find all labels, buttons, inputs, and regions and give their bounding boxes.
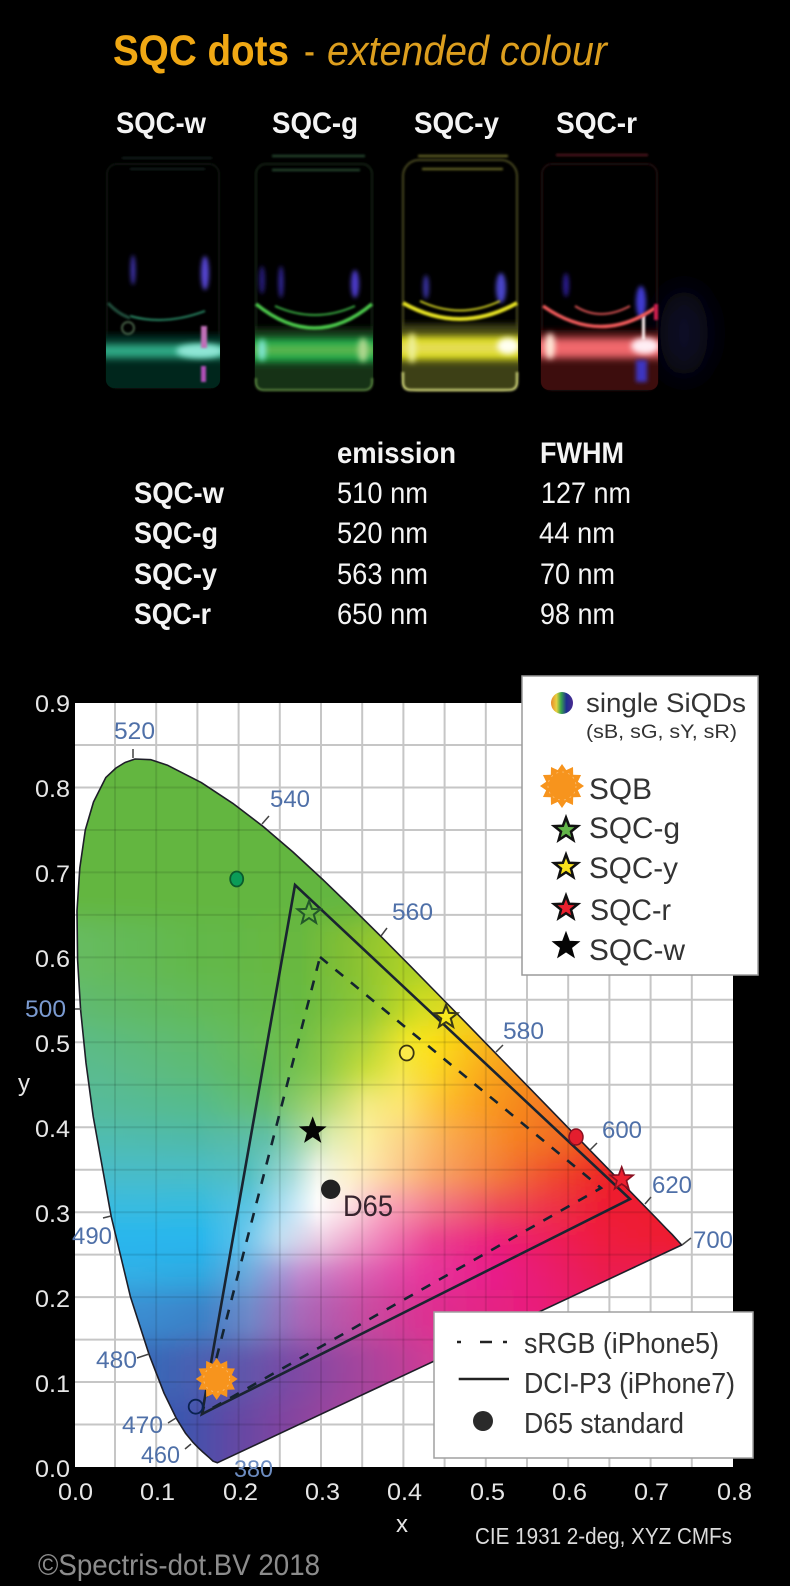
wavelength labels: 480 xyxy=(96,1347,137,1374)
y axis labels: 0.5 xyxy=(35,1031,70,1058)
legend: gamuts xyxy=(434,1312,753,1458)
legend icon: SQB xyxy=(540,764,584,808)
axis title: x: x xyxy=(396,1511,408,1538)
axis title: y: y xyxy=(18,1070,30,1097)
legend label: SQB: SQB xyxy=(589,773,652,806)
title: - xyxy=(304,27,315,74)
row: SQC-w: 127 nm xyxy=(541,477,631,510)
row: SQC-r: SQC-r xyxy=(134,598,211,631)
marker: D65 xyxy=(321,1180,340,1199)
gamut colour fill xyxy=(78,760,680,1462)
x axis labels xyxy=(58,1479,752,1506)
legend label: SQC-r: SQC-r xyxy=(590,894,671,927)
wavelength labels: 470 xyxy=(122,1412,163,1439)
wavelength labels: 490 xyxy=(72,1223,112,1250)
vial: SQC-y xyxy=(397,156,523,394)
wavelength labels: 700 xyxy=(693,1227,733,1254)
chart: CIE 1931 chromaticity diagram xyxy=(0,676,790,1538)
y axis labels: 0.6 xyxy=(35,946,70,973)
title: extended colour xyxy=(327,27,609,74)
legend label: DCI-P3: DCI-P3 (iPhone7) xyxy=(524,1368,735,1400)
vial labels xyxy=(116,107,637,140)
vial labels: SQC-g xyxy=(272,107,358,140)
legend sublabel: (sB, sG, sY, sR) xyxy=(586,722,737,743)
row: SQC-r: 98 nm xyxy=(540,598,615,631)
x axis labels: 0.8 xyxy=(717,1479,752,1506)
row: SQC-r: 650 nm xyxy=(337,598,428,631)
row: SQC-w: 510 nm xyxy=(337,477,428,510)
row: SQC-g: 520 nm xyxy=(337,517,428,550)
icon: rainbow dot xyxy=(551,692,573,714)
wavelength labels: 500 xyxy=(25,996,66,1023)
vial: SQC-r xyxy=(536,155,708,394)
x axis labels: 0.6 xyxy=(552,1479,587,1506)
marker: single SiQD green xyxy=(230,872,243,886)
title: SQC dots xyxy=(113,27,289,75)
x axis labels: 0.3 xyxy=(305,1479,340,1506)
wavelength labels: 600 xyxy=(602,1117,642,1144)
x axis labels: 0.2 xyxy=(223,1479,258,1506)
photo: four glowing vials xyxy=(100,155,708,394)
wavelength labels: 560 xyxy=(392,899,433,926)
row: SQC-y: 563 nm xyxy=(337,558,428,591)
row: SQC-y xyxy=(134,558,615,591)
legend sample: sRGB dashes xyxy=(457,1341,507,1343)
wavelength labels: 460 xyxy=(141,1442,180,1469)
y axis labels: 0.9 xyxy=(35,691,70,718)
x axis labels: 0.4 xyxy=(387,1479,422,1506)
legend: dots xyxy=(522,676,758,975)
legend sample: D65 dot xyxy=(473,1411,493,1431)
y axis labels: 0.2 xyxy=(35,1286,70,1313)
marker: single SiQD yellow xyxy=(400,1046,414,1060)
label: D65: D65 xyxy=(343,1190,393,1223)
marker: SQC-r star xyxy=(610,1167,633,1189)
emission table xyxy=(134,437,631,631)
row: SQC-r xyxy=(134,598,615,631)
legend icon: SQC-y xyxy=(554,854,578,877)
marker: SQC-g star xyxy=(298,901,320,923)
marker: SQC-y star xyxy=(435,1005,457,1027)
copyright: ©Spectris-dot.BV 2018 xyxy=(38,1549,320,1582)
x axis labels: 0.7 xyxy=(634,1479,669,1506)
wavelength labels: 380 xyxy=(234,1456,273,1483)
vial: SQC-w xyxy=(100,158,226,394)
DCI-P3 triangle xyxy=(202,885,630,1414)
marker: SQB sun xyxy=(196,1358,238,1400)
y axis labels: 0.8 xyxy=(35,776,70,803)
wavelength labels: 520 xyxy=(114,718,155,745)
legend label: SQC-y: SQC-y xyxy=(589,852,678,885)
table header: FWHM xyxy=(540,437,624,470)
legend label: SQC-g: SQC-g xyxy=(589,812,680,845)
marker: SQC-w star xyxy=(301,1118,325,1141)
vial labels: SQC-w xyxy=(116,107,207,140)
wavelength labels: 620 xyxy=(652,1172,692,1199)
vial labels: SQC-r xyxy=(556,107,637,140)
x axis labels: 0.0 xyxy=(58,1479,93,1506)
y axis labels: 0.3 xyxy=(35,1201,70,1228)
x axis labels: 0.1 xyxy=(140,1479,175,1506)
wavelength labels: 540 xyxy=(270,786,310,813)
legend label: single SiQDs: single SiQDs xyxy=(586,688,746,718)
row: SQC-y: 70 nm xyxy=(540,558,615,591)
y axis labels: 0.0 xyxy=(35,1456,70,1483)
legend icon: SQC-r xyxy=(554,896,578,918)
row: SQC-g xyxy=(134,517,615,550)
y axis labels xyxy=(35,691,70,1483)
row: SQC-g: SQC-g xyxy=(134,517,218,550)
legend icon: SQC-w xyxy=(554,933,578,957)
wavelength labels xyxy=(25,718,733,1483)
title xyxy=(113,27,609,75)
legend icon: SQC-g xyxy=(554,818,578,840)
row: SQC-w: SQC-w xyxy=(134,477,225,510)
caption: CIE: CIE 1931 2-deg, XYZ CMFs xyxy=(475,1523,732,1549)
vial: SQC-g xyxy=(250,156,378,394)
plot area xyxy=(75,703,733,1467)
legend label: D65 standard: D65 standard xyxy=(524,1408,684,1440)
y axis labels: 0.1 xyxy=(35,1371,70,1398)
y axis labels: 0.7 xyxy=(35,861,70,888)
legend label: SQC-w: SQC-w xyxy=(589,934,685,967)
row: SQC-w xyxy=(134,477,631,510)
row: SQC-y: SQC-y xyxy=(134,558,217,591)
x axis labels: 0.5 xyxy=(470,1479,505,1506)
vial labels: SQC-y xyxy=(414,107,499,140)
marker: single SiQD blue xyxy=(189,1400,203,1414)
marker: single SiQD red xyxy=(569,1129,583,1145)
spectral locus outline xyxy=(77,759,682,1463)
table header xyxy=(337,437,624,470)
legend sample: DCI-P3 line xyxy=(459,1378,509,1380)
wavelength labels: 580 xyxy=(503,1018,544,1045)
table header: emission xyxy=(337,437,456,470)
wavelength ticks xyxy=(75,749,691,1449)
sRGB triangle xyxy=(202,957,601,1414)
y axis labels: 0.4 xyxy=(35,1116,70,1143)
row: SQC-g: 44 nm xyxy=(539,517,615,550)
legend label: sRGB: sRGB (iPhone5) xyxy=(524,1328,719,1360)
